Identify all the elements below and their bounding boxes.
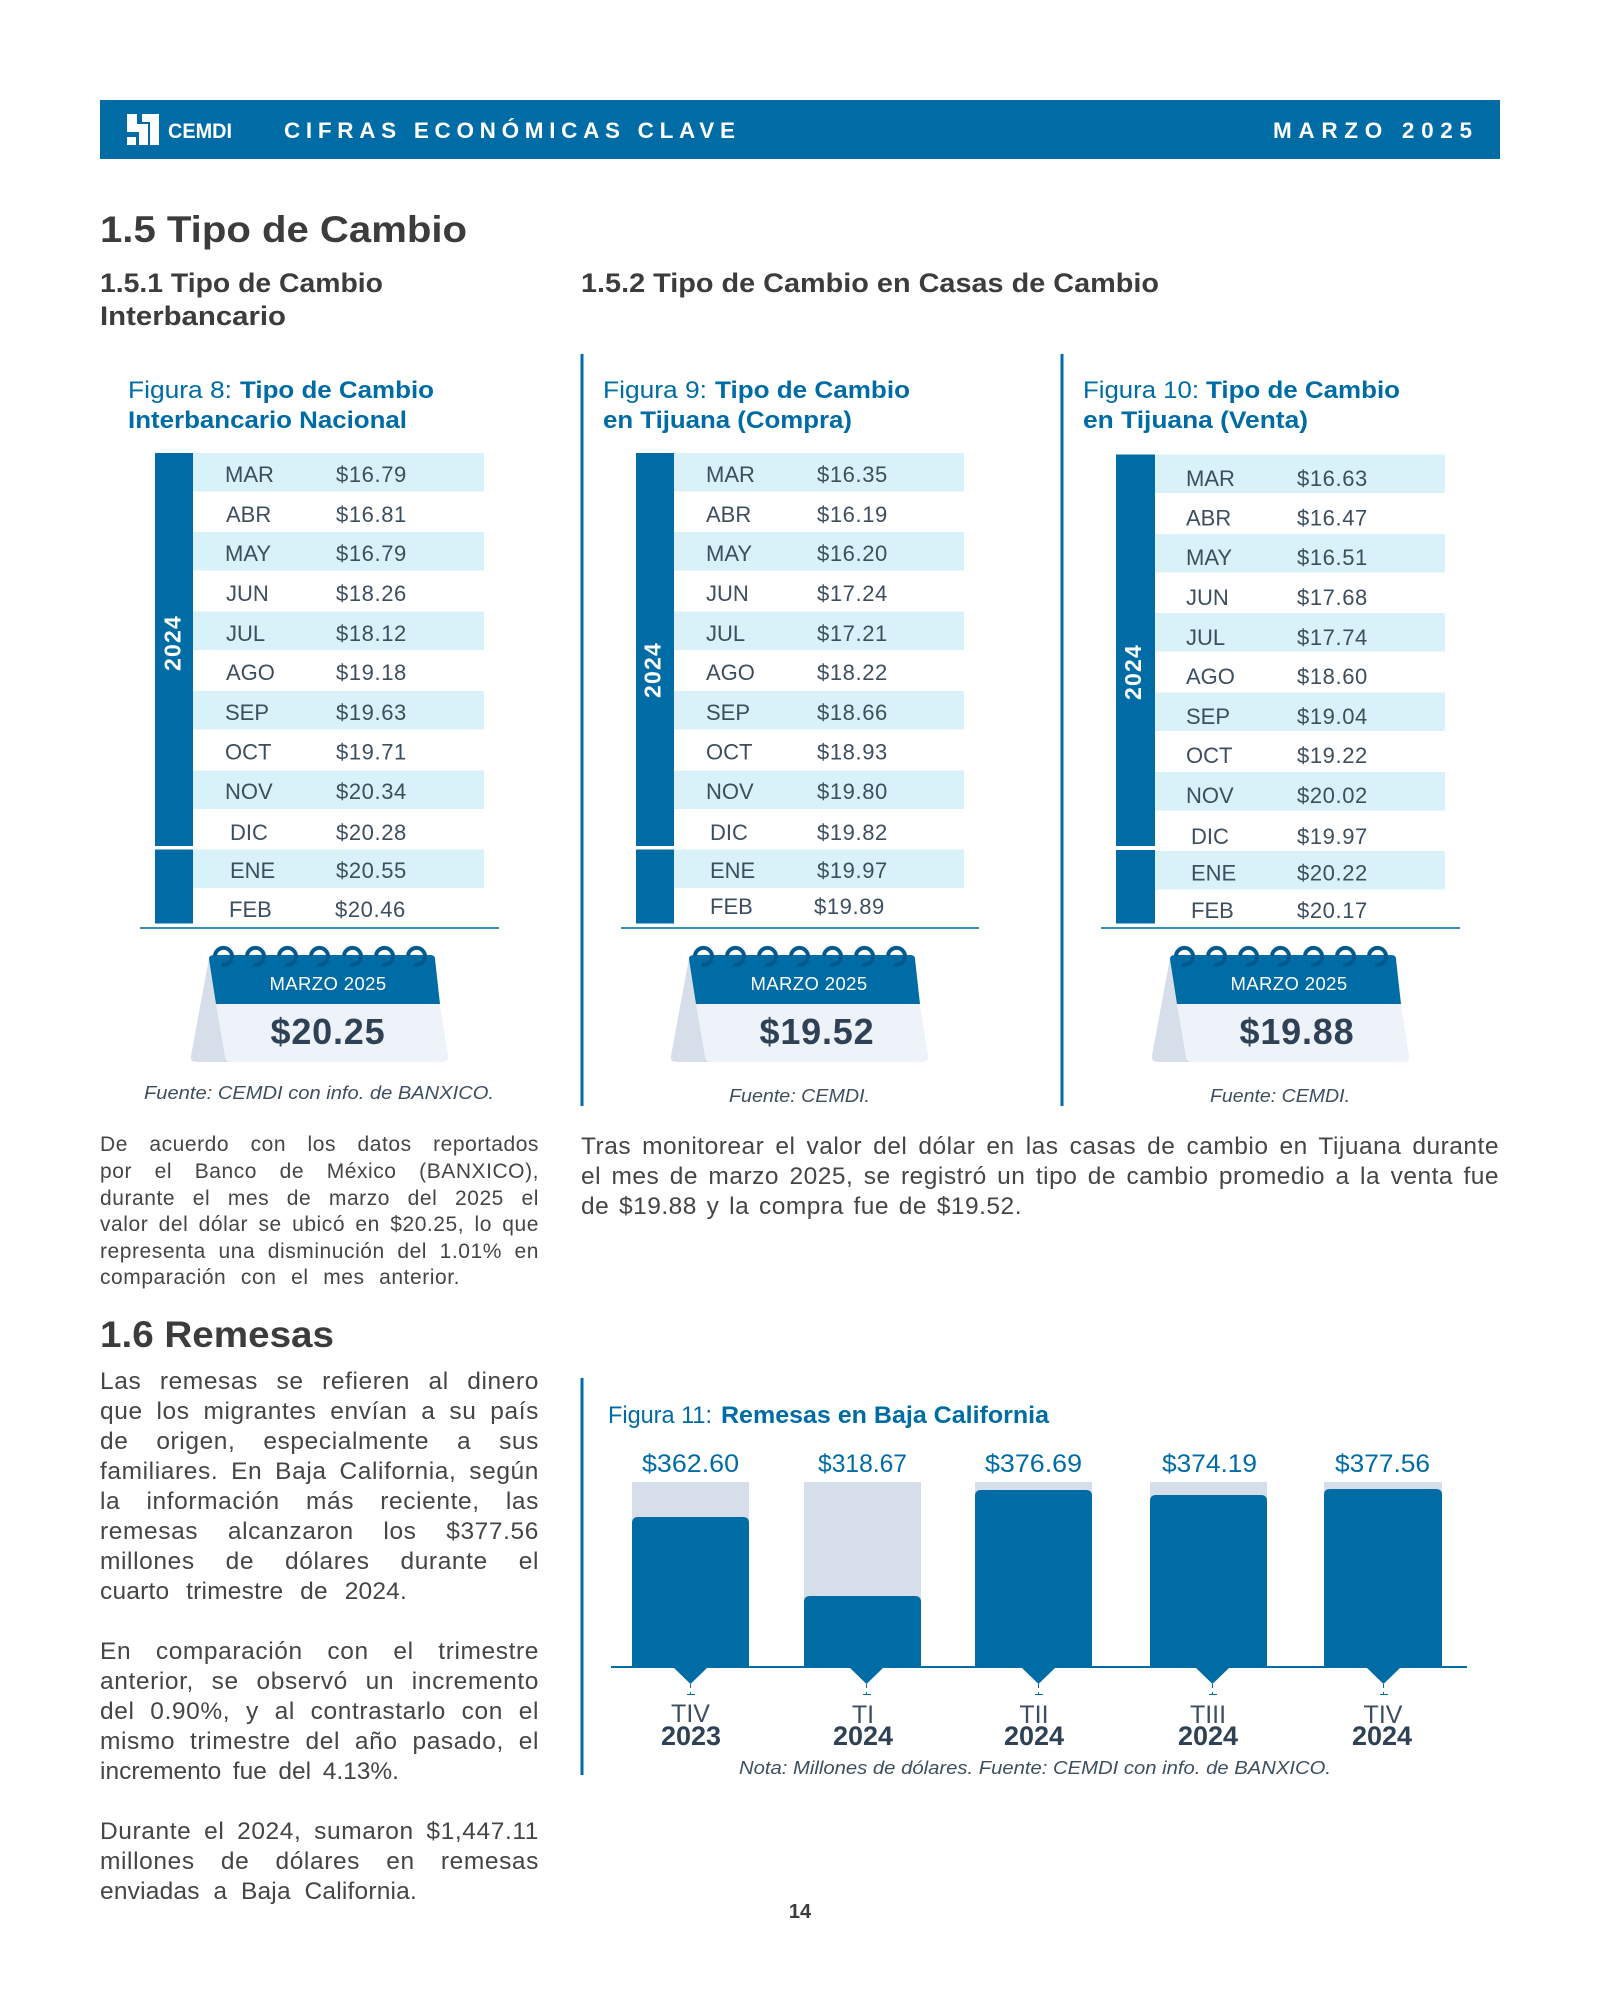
panel: figure 11 (580, 1378, 1467, 1778)
heading: 1.5.2: 1.5.2 Tipo de Cambio en Casas de Cambio (581, 268, 1159, 298)
table figure 8: MAY (225, 541, 271, 566)
text block: remesas: familiares. En Baja California, según (100, 1458, 539, 1484)
table figure 10: OCT (1186, 743, 1232, 768)
logo: CEMDI: CEMDI (168, 120, 232, 143)
table figure 8: $16.79 (336, 541, 407, 566)
figure 9 title (603, 377, 910, 434)
table figure 10: $18.60 (1297, 664, 1368, 689)
chart note: Nota: Millones de dólares. Fuente: CEMDI con info. de BANXICO. (739, 1758, 1331, 1778)
table figure 8: NOV (225, 779, 273, 804)
text block: remesas (100, 1368, 539, 1904)
table figure 8 (140, 453, 499, 929)
table figure 10: $16.63 (1297, 466, 1368, 491)
figure 11 title: Figura 11: (608, 1402, 712, 1429)
table figure 9: $16.35 (817, 462, 888, 487)
figure 10 title: Figura 10: (1083, 377, 1199, 404)
table figure 9: JUN (706, 581, 749, 606)
calendar figure 10: $19.88 (1240, 1011, 1354, 1052)
table figure 10: DIC (1191, 824, 1229, 849)
table figure 9: $19.89 (814, 894, 885, 919)
vertical divider: figure 9 (580, 354, 584, 1106)
table figure 8: $20.28 (336, 820, 407, 845)
figure 8 title: Tipo de Cambio (240, 377, 434, 404)
figure 9 title: en Tijuana (Compra) (603, 407, 852, 434)
panel: figure 8 (128, 377, 499, 1103)
source figure 8: Fuente: CEMDI con info. de BANXICO. (144, 1083, 494, 1103)
table figure 10: $16.51 (1297, 545, 1368, 570)
table figure 8: $20.46 (335, 897, 406, 922)
table figure 9: DIC (710, 820, 748, 845)
text block: tipo de cambio interbancario: representa una disminución del 1.01% en (100, 1240, 539, 1263)
table figure 8: $16.81 (336, 502, 407, 527)
figure 9 title: Tipo de Cambio (715, 377, 910, 404)
text block: remesas: En comparación con el trimestre (100, 1638, 539, 1664)
table figure 8: ABR (226, 502, 271, 527)
table figure 8: $20.55 (336, 858, 407, 883)
table figure 10: JUN (1186, 585, 1229, 610)
table figure 9: MAY (706, 541, 752, 566)
table figure 8: $19.18 (336, 660, 407, 685)
quarter labels: TIV (671, 1700, 710, 1728)
bar value labels: $362.60 (642, 1450, 739, 1478)
table figure 10: $17.68 (1297, 585, 1368, 610)
table figure 10: 2024 (1120, 644, 1146, 700)
table figure 9: JUL (706, 621, 745, 646)
table figure 8: $18.26 (336, 581, 407, 606)
table figure 8: $16.79 (336, 462, 407, 487)
bar chart (611, 1450, 1467, 1751)
calendar figure 8: $20.25 (271, 1011, 385, 1052)
text block: tipo de cambio interbancario: durante el mes de marzo del 2025 el (100, 1187, 539, 1210)
bar value labels: $318.67 (818, 1450, 907, 1478)
text block: tipo de cambio interbancario: comparación con el mes anterior. (100, 1266, 460, 1289)
heading: 1.5.1: Interbancario (100, 301, 286, 331)
table figure 8: AGO (226, 660, 275, 685)
table figure 9: 2024 (640, 642, 666, 698)
table figure 10: ABR (1186, 506, 1231, 530)
table figure 9: $19.97 (817, 858, 888, 883)
table figure 9: ENE (710, 858, 755, 883)
table figure 8: SEP (225, 700, 269, 725)
header title: CIFRAS ECONÓMICAS CLAVE (284, 118, 735, 143)
table figure 8: $18.12 (336, 621, 407, 646)
text block: casas de cambio: de $19.88 y la compra fue de $19.52. (581, 1193, 1022, 1220)
calendar figure 10: MARZO 2025 (1230, 973, 1348, 994)
table figure 10: $19.22 (1297, 743, 1368, 768)
logo: CEMDI (127, 114, 232, 145)
table figure 9: $17.24 (817, 581, 888, 606)
calendar figure 10 (1152, 948, 1409, 1062)
table figure 9: FEB (710, 894, 753, 919)
table figure 8: $20.34 (336, 779, 407, 804)
table figure 9: NOV (706, 779, 754, 804)
text block: tipo de cambio interbancario: por el Banco de México (BANXICO), (100, 1160, 539, 1183)
table figure 10: $19.97 (1297, 824, 1368, 849)
table figure 9: SEP (706, 700, 750, 725)
table figure 9: $17.21 (817, 621, 888, 646)
header date: MARZO 2025 (1273, 118, 1472, 143)
source figure 10: Fuente: CEMDI. (1210, 1086, 1350, 1106)
text block: remesas: del 0.90%, y al contrastarlo con el (100, 1698, 539, 1724)
quarter labels: TIII (1190, 1701, 1226, 1729)
bar tracks (632, 1482, 1442, 1667)
table figure 10: JUL (1186, 625, 1225, 650)
text block: remesas: enviadas a Baja California. (100, 1878, 417, 1904)
table figure 10 (1101, 454, 1460, 929)
table figure 8: $19.71 (336, 740, 407, 764)
table figure 10: MAY (1186, 545, 1232, 570)
figure 8 title (128, 377, 434, 434)
heading: 1.5 Tipo de Cambio: 1.5 Tipo de Cambio (100, 209, 467, 250)
table figure 10: NOV (1186, 783, 1234, 808)
table figure 10: SEP (1186, 704, 1230, 729)
quarter labels: 2024 (833, 1721, 893, 1751)
table figure 9: AGO (706, 660, 755, 685)
table figure 10: $19.04 (1297, 704, 1368, 729)
figure 9 title: Figura 9: (603, 377, 707, 404)
bar value labels: $377.56 (1335, 1450, 1430, 1478)
table figure 9: ABR (706, 502, 751, 527)
bar value labels (642, 1450, 1430, 1478)
calendar figure 9: $19.52 (760, 1011, 874, 1052)
table figure 10: FEB (1191, 898, 1234, 923)
text block: remesas: Las remesas se refieren al dinero (100, 1368, 539, 1394)
text block: remesas: mismo trimestre del año pasado, el (100, 1728, 539, 1754)
figure 8 title: Interbancario Nacional (128, 407, 407, 434)
heading: 1.5.1 (100, 268, 383, 331)
calendar figure 9 (671, 948, 928, 1062)
table figure 8: ENE (230, 858, 275, 883)
source figure 9: Fuente: CEMDI. (729, 1086, 870, 1106)
figure 10 title: en Tijuana (Venta) (1083, 407, 1308, 434)
table figure 10: $20.22 (1297, 860, 1368, 886)
table figure 10: $16.47 (1297, 506, 1368, 530)
calendar figure 9: MARZO 2025 (750, 973, 868, 994)
text block: remesas: millones de dólares en remesas (100, 1848, 539, 1874)
text block: remesas: millones de dólares durante el (100, 1548, 539, 1574)
quarter labels: 2024 (1004, 1721, 1064, 1751)
table figure 9 (621, 453, 979, 929)
quarter labels: 2024 (1178, 1721, 1238, 1751)
text block: remesas: de origen, especialmente a sus (100, 1428, 539, 1454)
quarter labels: TI (852, 1701, 874, 1729)
text block: tipo de cambio interbancario: valor del dólar se ubicó en $20.25, lo que (100, 1213, 539, 1236)
table figure 9: MAR (706, 462, 755, 487)
axis line (611, 1666, 1467, 1668)
text block: remesas: anterior, se observó un incremento (100, 1668, 539, 1694)
table figure 9: OCT (706, 740, 752, 764)
vertical divider: figure 10 (1060, 354, 1064, 1106)
figure 8 title: Figura 8: (128, 377, 232, 404)
table figure 8: FEB (229, 897, 272, 922)
panel: figure 9 (603, 377, 979, 1106)
quarter labels: TII (1019, 1701, 1049, 1729)
table figure 8: JUL (226, 621, 265, 646)
table figure 8: $19.63 (336, 700, 407, 725)
text block: remesas: cuarto trimestre de 2024. (100, 1578, 407, 1604)
table figure 10: ENE (1191, 860, 1236, 886)
quarter labels: 2024 (1352, 1721, 1412, 1751)
table figure 10: $20.02 (1297, 783, 1368, 808)
text block: tipo de cambio interbancario: De acuerdo con los datos reportados (100, 1133, 539, 1156)
table figure 8: MAR (225, 462, 274, 487)
panel: figure 10 (1083, 377, 1460, 1106)
bar value labels: $374.19 (1162, 1450, 1257, 1478)
table figure 9: $18.93 (817, 740, 888, 764)
heading: 1.6 Remesas: 1.6 Remesas (100, 1314, 334, 1355)
text block: tipo de cambio interbancario (100, 1133, 539, 1289)
text block: remesas: incremento fue del 4.13%. (100, 1758, 399, 1784)
text block: remesas: Durante el 2024, sumaron $1,447.11 (100, 1818, 539, 1844)
table figure 8: JUN (226, 581, 269, 606)
text block: casas de cambio: Tras monitorear el valor del dólar en las casas de cambio en Tijuana durante (581, 1133, 1499, 1160)
table figure 9: $16.19 (817, 502, 888, 527)
table figure 9: $18.66 (817, 700, 888, 725)
page number: 14 (789, 1901, 812, 1923)
quarter labels: 2023 (661, 1721, 721, 1751)
quarter labels: TIV (1364, 1701, 1403, 1729)
table figure 9: $18.22 (817, 660, 888, 685)
bar value labels: $376.69 (985, 1450, 1082, 1478)
table figure 9: $19.82 (817, 820, 888, 845)
table figure 9: $19.80 (817, 779, 888, 804)
calendar figure 8 (191, 948, 448, 1062)
text block: casas de cambio: el mes de marzo 2025, se registró un tipo de cambio promedio a la venta fue (581, 1163, 1499, 1190)
text block: remesas: la información más reciente, las (100, 1488, 539, 1514)
table figure 9: $16.20 (817, 541, 888, 566)
table figure 8: OCT (225, 740, 271, 764)
figure 10 title (1083, 377, 1400, 434)
calendar figure 8: MARZO 2025 (269, 973, 387, 994)
table figure 8: DIC (230, 820, 268, 845)
table figure 10: $20.17 (1297, 898, 1368, 923)
heading: 1.5.1: 1.5.1 Tipo de Cambio (100, 268, 383, 298)
header band (100, 100, 1500, 159)
bars (632, 1489, 1442, 1668)
quarter labels (661, 1700, 1412, 1751)
arrow markers (674, 1668, 1400, 1695)
text block: casas de cambio (581, 1133, 1499, 1220)
text block: remesas: que los migrantes envían a su país (100, 1398, 539, 1424)
text block: remesas: remesas alcanzaron los $377.56 (100, 1518, 539, 1544)
table figure 10: AGO (1186, 664, 1235, 689)
table figure 10: MAR (1186, 466, 1235, 491)
figure 11 title: Remesas en Baja California (721, 1402, 1050, 1429)
table figure 8: 2024 (160, 615, 186, 671)
table figure 10: $17.74 (1297, 625, 1368, 650)
figure 10 title: Tipo de Cambio (1206, 377, 1400, 404)
